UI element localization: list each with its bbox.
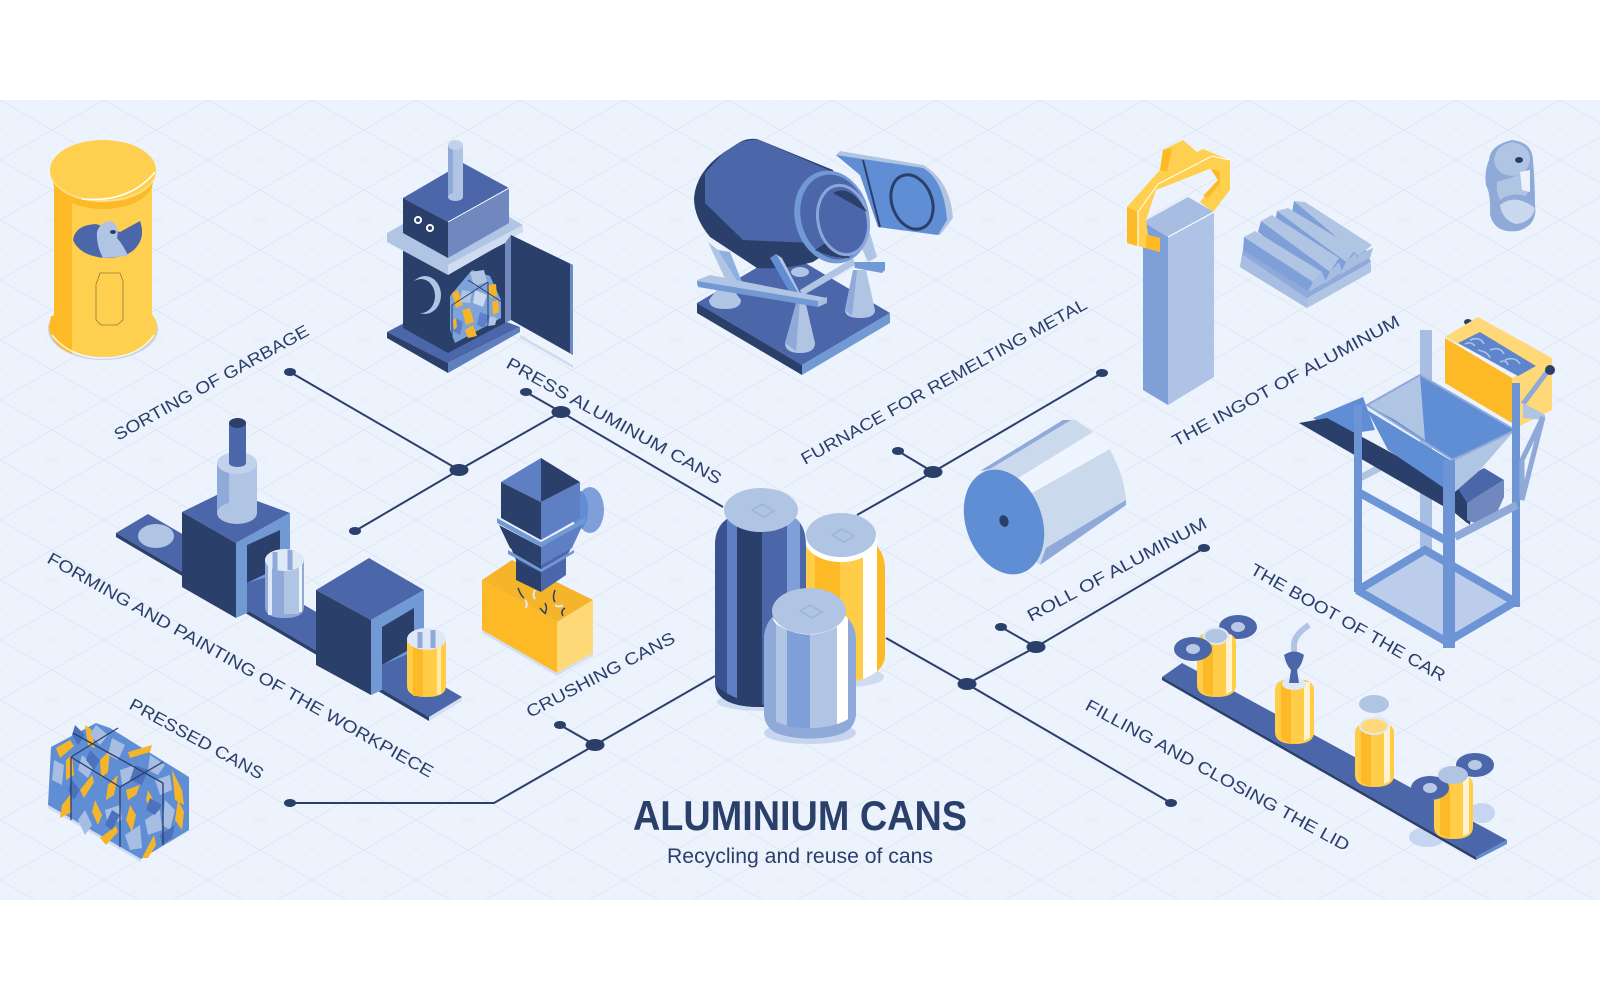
hopper: [1367, 375, 1515, 492]
yellow clamp: [1127, 140, 1230, 252]
furnace mouth: [811, 181, 875, 259]
connector nodes: [284, 368, 1210, 807]
icon: ingot with clamp: [1127, 140, 1230, 405]
silver can: [764, 588, 856, 745]
icon: three aluminium cans: [715, 488, 885, 745]
silver cup: [265, 549, 304, 618]
filled can with hovering lid: [1355, 695, 1394, 787]
press open door: [505, 235, 573, 355]
furnace front frame and cone: [697, 254, 855, 353]
yellow can: [805, 513, 885, 690]
frame back and floor: [1358, 330, 1512, 640]
bin slot with can: [73, 221, 142, 258]
furnace base plate: [697, 251, 890, 375]
open can with seaming discs: [1174, 615, 1257, 697]
filling can with spout: [1275, 625, 1314, 744]
icon: roll of aluminium: [950, 420, 1126, 586]
crusher hopper: [497, 458, 585, 592]
dark blue can: [715, 488, 806, 712]
furnace back frame and cones: [708, 233, 885, 318]
closed can with discs: [1411, 753, 1494, 839]
yellow bin with scrap: [1445, 317, 1555, 430]
icon: pressed cans bale: [48, 723, 189, 862]
second press unit: [316, 558, 424, 695]
label: filling and closing the lid: FILLING AND CLOSING THE LID: [1082, 696, 1353, 855]
conveyor: [1299, 397, 1504, 525]
furnace drum: [694, 139, 880, 272]
crusher yellow box: [482, 560, 593, 676]
icon: crushed can: [1485, 140, 1535, 231]
icon: yellow recycling bin: [48, 140, 158, 360]
subtitle: Recycling and reuse of cans: [667, 845, 933, 868]
label: roll of aluminum: ROLL OF ALUMINUM: [1024, 514, 1210, 626]
label: the ingot of aluminum: THE INGOT OF ALUMINUM: [1169, 312, 1403, 451]
forming conveyor belt: [116, 514, 462, 721]
blank disc: [138, 524, 174, 548]
scrap inside press: [450, 270, 502, 345]
title: ALUMINIUM CANS: [633, 792, 967, 839]
label: crushing cans: CRUSHING CANS: [523, 629, 678, 722]
first press unit: [182, 418, 290, 618]
label: sorting of garbage: SORTING OF GARBAGE: [111, 321, 312, 444]
label: furnace for remelting metal: FURNACE FOR REMELTING METAL: [798, 295, 1090, 468]
label: pressed cans: PRESSED CANS: [126, 695, 267, 783]
press top box: [403, 163, 509, 258]
furnace door: [836, 151, 953, 235]
yellow cup: [407, 628, 446, 697]
background panel with isometric grid: [0, 100, 1600, 900]
label: press aluminum cans: PRESS ALUMINUM CANS: [503, 354, 725, 488]
press pipe: [448, 140, 463, 201]
press base: [387, 300, 520, 373]
flow connector lines: [290, 372, 1204, 803]
filling conveyor belt: [1162, 663, 1507, 860]
can outline on bin: [96, 273, 123, 325]
icon: filling and closing line: [1162, 615, 1507, 860]
crusher side housing: [572, 487, 604, 533]
press plate: [387, 190, 523, 275]
icon: forming and painting line: [116, 418, 462, 721]
icon: remelting furnace: [694, 139, 953, 375]
icon: can crusher: [482, 458, 604, 676]
frame front: [1357, 383, 1543, 648]
label: the boot of the car: THE BOOT OF THE CAR: [1247, 560, 1449, 685]
press body: [403, 242, 511, 359]
icon: press machine: [387, 140, 573, 373]
label: forming and painting of the workpiece: FORMING AND PAINTING OF THE WORKPIECE: [44, 549, 437, 781]
icon: hopper loading machine: [1299, 317, 1555, 648]
icon: stack of aluminum ingots: [1240, 201, 1373, 308]
